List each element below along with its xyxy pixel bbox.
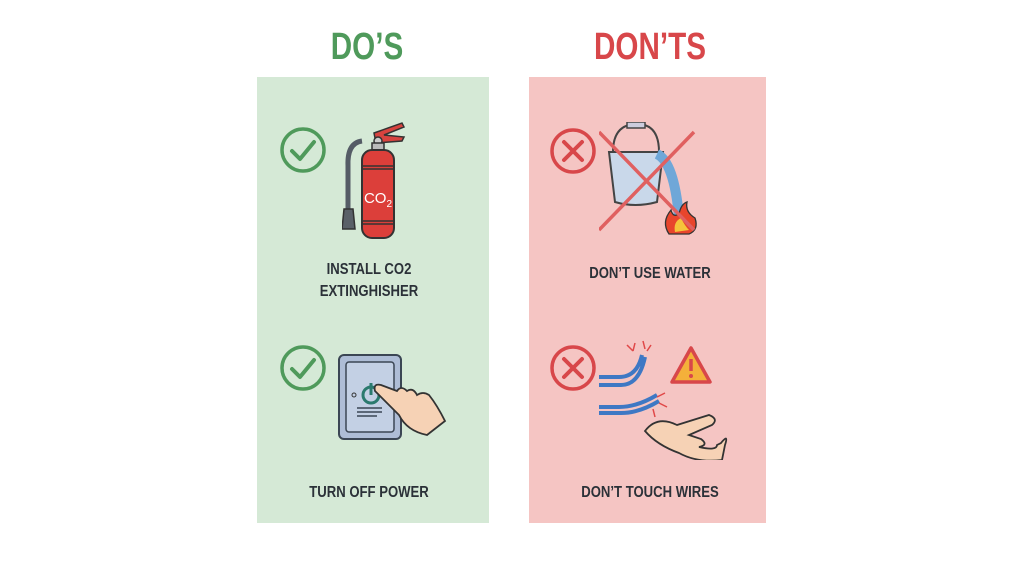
icon: damaged wires and hand — [599, 340, 728, 460]
icon: cross 2 — [550, 345, 596, 391]
panel: don'ts — [529, 77, 766, 523]
icon: check 2 — [280, 345, 326, 391]
title: don'ts: DON’TS — [594, 26, 706, 68]
icon: power switch with hand — [338, 354, 446, 440]
icon: CO2 extinguisher: CO — [364, 190, 386, 207]
icon: check 1 — [280, 127, 326, 173]
label: turn off power: TURN OFF POWER — [309, 484, 429, 501]
label: install co2 — [320, 261, 418, 300]
label: don't touch wires: DON’T TOUCH WIRES — [581, 484, 719, 501]
icon: CO2 extinguisher — [342, 122, 406, 239]
icon: crossed bucket of water on fire — [599, 122, 697, 235]
icon: cross 1 — [550, 128, 596, 174]
panel: do's — [257, 77, 489, 523]
label: install co2: EXTINGHISHER — [320, 283, 418, 300]
title: do's: DO’S — [331, 26, 403, 68]
label: don't use water: DON’T USE WATER — [589, 265, 711, 282]
label: install co2: INSTALL CO2 — [327, 261, 411, 278]
icon: CO2 extinguisher: 2 — [386, 199, 392, 210]
icon: warning triangle — [670, 346, 712, 384]
